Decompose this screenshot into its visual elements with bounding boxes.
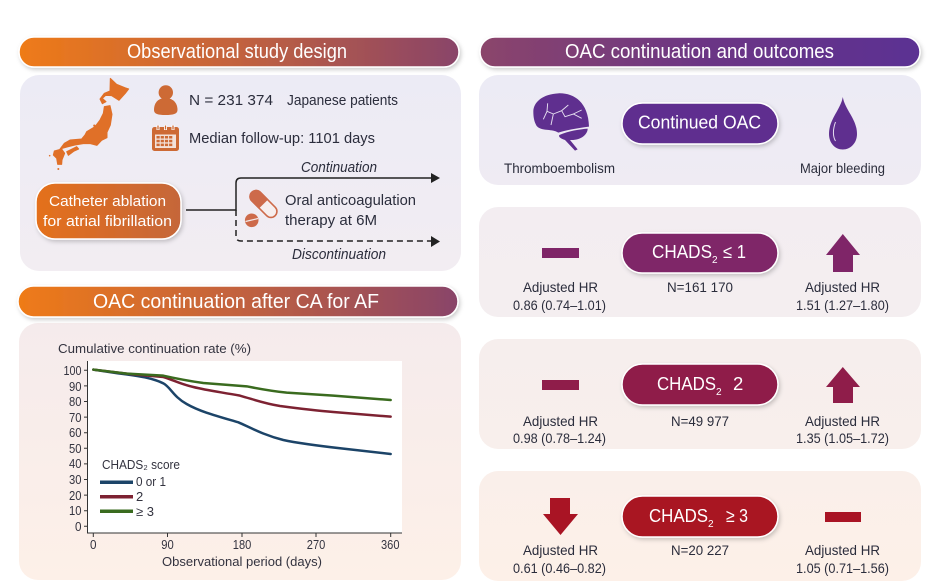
pill: continued OAC: Continued OAC <box>638 112 761 132</box>
panel: outcomes legend background <box>479 75 921 185</box>
icon: up arrow <box>826 367 860 403</box>
text: adjusted HR thromboembolism: Adjusted HR <box>523 542 598 558</box>
curves <box>93 370 391 454</box>
text: adjusted HR bleeding: Adjusted HR <box>805 542 880 558</box>
y axis labels: 20 <box>69 488 82 503</box>
icon: up arrow <box>826 234 860 272</box>
label: continuation: Continuation <box>301 159 377 176</box>
text: adjusted HR bleeding: Adjusted HR <box>805 413 880 429</box>
text: adjusted HR bleeding <box>796 542 889 576</box>
heading: OAC continuation and outcomes <box>480 37 920 67</box>
legend: 0 or 1 <box>136 474 166 489</box>
x axis labels <box>90 537 400 552</box>
text: oral anticoagulation therapy: Oral anticoagulation <box>285 192 416 209</box>
icon: blood drop <box>829 97 857 150</box>
icon: no change thromboembolism <box>542 380 579 390</box>
x axis labels: 270 <box>307 537 325 552</box>
text: adjusted HR thromboembolism: 0.61 (0.46–0.82) <box>513 560 606 576</box>
text: adjusted HR thromboembolism: 0.98 (0.78–1.24) <box>513 430 606 446</box>
pill: CHADS2 at least 3 <box>622 496 778 537</box>
arrow: continuation branch <box>186 173 440 210</box>
text: adjusted HR bleeding <box>796 413 889 446</box>
y axis labels <box>64 363 82 534</box>
icon: capsule and tablet <box>245 187 280 227</box>
text: oral anticoagulation therapy: therapy at 6M <box>285 212 377 229</box>
heading: observational study design <box>19 37 459 67</box>
row: CHADS2 equals 2 <box>513 364 889 446</box>
text: patient count <box>189 92 398 109</box>
pill: CHADS2 at least 3: 2 <box>708 519 714 530</box>
text: adjusted HR thromboembolism: Adjusted HR <box>523 413 598 429</box>
box: catheter ablation <box>36 183 181 239</box>
panel: CHADS2 equals 2 background <box>479 339 921 449</box>
pill: CHADS2 at least 3: ≥ 3 <box>726 505 748 526</box>
label: major bleeding: Major bleeding <box>800 160 885 176</box>
text: patient count: N = 231 374 <box>189 92 273 109</box>
text: adjusted HR bleeding: 1.35 (1.05–1.72) <box>796 430 889 446</box>
icon: no change thromboembolism <box>542 248 579 258</box>
pill: CHADS2 at least 3: CHADS <box>649 505 708 526</box>
text: adjusted HR thromboembolism: Adjusted HR <box>523 279 598 295</box>
y axis labels: 100 <box>64 363 82 378</box>
label: thromboembolism: Thromboembolism <box>504 160 615 176</box>
pill: CHADS2 up to 1: 2 <box>712 255 718 266</box>
heading: observational study design: Observational study design <box>127 40 347 63</box>
y axis labels: 40 <box>69 456 82 471</box>
x axis labels: 0 <box>90 537 96 552</box>
pill: CHADS2 equals 2 <box>622 364 778 405</box>
y axis labels: 80 <box>69 394 82 409</box>
panel: OAC continuation chart background <box>19 323 461 580</box>
text: sample size: N=49 977 <box>671 413 729 429</box>
text: adjusted HR bleeding: Adjusted HR <box>805 279 880 295</box>
text: adjusted HR thromboembolism <box>513 413 606 446</box>
chart title: Cumulative continuation rate (%) <box>58 341 251 356</box>
text: adjusted HR thromboembolism: 0.86 (0.74–1.01) <box>513 297 606 313</box>
x axis labels: 360 <box>381 537 400 552</box>
pill: continued OAC <box>622 103 778 144</box>
text: sample size: N=161 170 <box>667 279 733 295</box>
legend: 2 <box>136 489 143 504</box>
panel: study design background <box>20 75 461 271</box>
box: catheter ablation: Catheter ablation <box>49 193 166 210</box>
y axis labels: 60 <box>69 425 82 440</box>
legend <box>100 457 180 519</box>
y axis labels: 70 <box>69 410 82 425</box>
heading: OAC continuation after CA for AF <box>18 286 458 317</box>
heading: OAC continuation and outcomes: OAC continuation and outcomes <box>565 40 834 63</box>
legend: CHADS₂ score <box>102 457 180 472</box>
pill: CHADS2 up to 1 <box>622 233 778 273</box>
text: adjusted HR bleeding: 1.51 (1.27–1.80) <box>796 297 889 313</box>
pill: CHADS2 equals 2: 2 <box>716 387 722 398</box>
pill: CHADS2 equals 2: CHADS <box>657 373 716 394</box>
y axis labels: 30 <box>69 472 82 487</box>
icon: no change bleeding <box>825 512 861 522</box>
y axis labels: 50 <box>69 441 82 456</box>
legend: ≥ 3 <box>136 504 154 519</box>
panel: CHADS2 at least 3 background <box>479 471 921 581</box>
y axis labels: 90 <box>69 379 82 394</box>
text: oral anticoagulation therapy <box>285 192 416 229</box>
pill: CHADS2 up to 1: ≤ 1 <box>723 241 746 262</box>
icon: patient <box>154 85 178 115</box>
y axis labels: 0 <box>75 519 82 534</box>
icon: brain <box>533 93 589 151</box>
text: adjusted HR bleeding <box>796 279 889 313</box>
heading: OAC continuation after CA for AF: OAC continuation after CA for AF <box>93 290 379 313</box>
row: CHADS2 up to 1 <box>513 233 889 313</box>
pill: CHADS2 up to 1: CHADS <box>652 241 712 262</box>
arrow: discontinuation branch <box>236 210 440 247</box>
row: CHADS2 at least 3 <box>513 496 889 576</box>
text: adjusted HR bleeding: 1.05 (0.71–1.56) <box>796 560 889 576</box>
panel: CHADS2 up to 1 background <box>479 207 921 317</box>
line chart: cumulative continuation rate <box>58 341 402 569</box>
text: patient count: Japanese patients <box>287 92 398 109</box>
text: sample size: N=20 227 <box>671 542 729 558</box>
x axis labels: 180 <box>233 537 251 552</box>
text: median follow-up: Median follow-up: 1101 days <box>189 130 375 147</box>
text: adjusted HR thromboembolism <box>513 279 606 313</box>
label: discontinuation: Discontinuation <box>292 246 386 263</box>
pill: CHADS2 equals 2: 2 <box>733 373 743 394</box>
x axis labels: 90 <box>161 537 174 552</box>
x axis title: Observational period (days) <box>162 554 322 569</box>
icon: map of Japan <box>49 78 129 169</box>
text: adjusted HR thromboembolism <box>513 542 606 576</box>
box: catheter ablation: for atrial fibrillation <box>43 213 172 230</box>
icon: down arrow <box>543 498 578 535</box>
icon: calendar <box>152 125 179 151</box>
y axis labels: 10 <box>69 503 82 518</box>
